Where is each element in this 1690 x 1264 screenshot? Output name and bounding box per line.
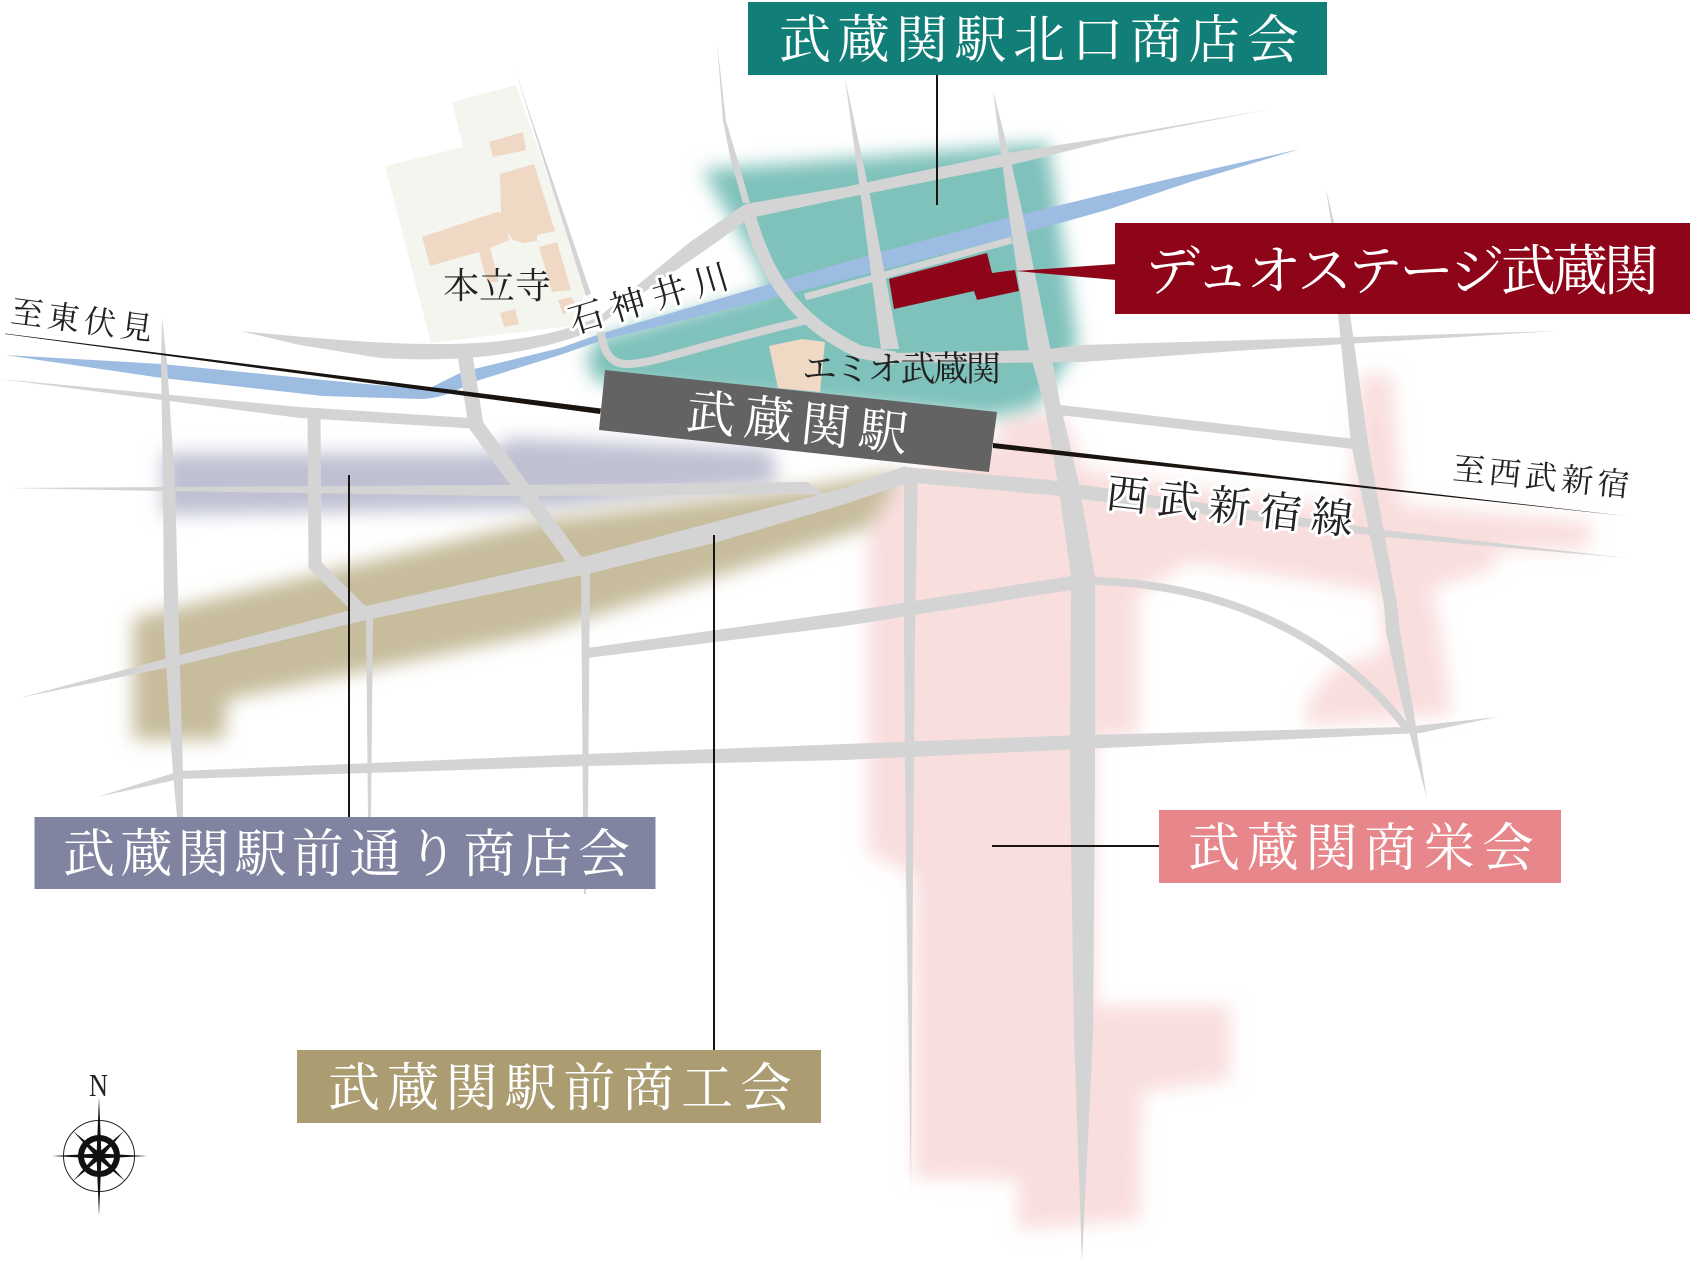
place label: 西武新宿線: 西武新宿線 <box>1104 470 1356 545</box>
label: 武蔵関商栄会 <box>1159 810 1561 883</box>
label: 武蔵関駅北口商店会: 武蔵関駅北口商店会 <box>779 13 1299 70</box>
place label: 石神井川: 石神井川 <box>564 257 733 342</box>
property: デュオステージ武蔵関 building <box>889 253 1019 309</box>
railway: 西武新宿線 west <box>5 334 601 414</box>
river: 石神井川 <box>5 149 1300 399</box>
label pointer <box>1016 264 1116 280</box>
leader lines <box>349 74 1160 1051</box>
label: デュオステージ武蔵関 <box>1115 223 1690 314</box>
station: 武蔵関駅 <box>599 370 997 472</box>
railway: 西武新宿線 east <box>993 443 1626 516</box>
place label: 至東伏見: 至東伏見 <box>9 293 155 347</box>
compass: N <box>89 1067 108 1103</box>
label: 武蔵関駅前商工会: 武蔵関駅前商工会 <box>328 1061 792 1118</box>
place label: エミオ武蔵関: エミオ武蔵関 <box>802 350 1001 389</box>
place label: 至西武新宿: 至西武新宿 <box>1451 450 1631 504</box>
area: 武蔵関駅前通り商店会 zone <box>163 438 777 515</box>
label: デュオステージ武蔵関: デュオステージ武蔵関 <box>1145 241 1659 302</box>
area: 武蔵関商栄会 zone <box>868 375 1590 1230</box>
temple grounds: 本立寺 <box>385 85 587 343</box>
label: 武蔵関駅前通り商店会: 武蔵関駅前通り商店会 <box>63 827 630 884</box>
road strokes <box>314 215 1408 730</box>
label: 武蔵関商栄会: 武蔵関商栄会 <box>1188 821 1534 878</box>
compass <box>52 1067 147 1216</box>
area: 武蔵関駅北口商店会 zone <box>586 143 1078 417</box>
place label: 本立寺: 本立寺 <box>443 266 551 306</box>
area: 武蔵関駅前商工会 zone <box>133 470 905 740</box>
building: エミオ武蔵関 <box>769 339 825 392</box>
label: 武蔵関駅前商工会 <box>297 1050 821 1123</box>
station: 武蔵関駅: 武蔵関駅 <box>684 384 910 462</box>
